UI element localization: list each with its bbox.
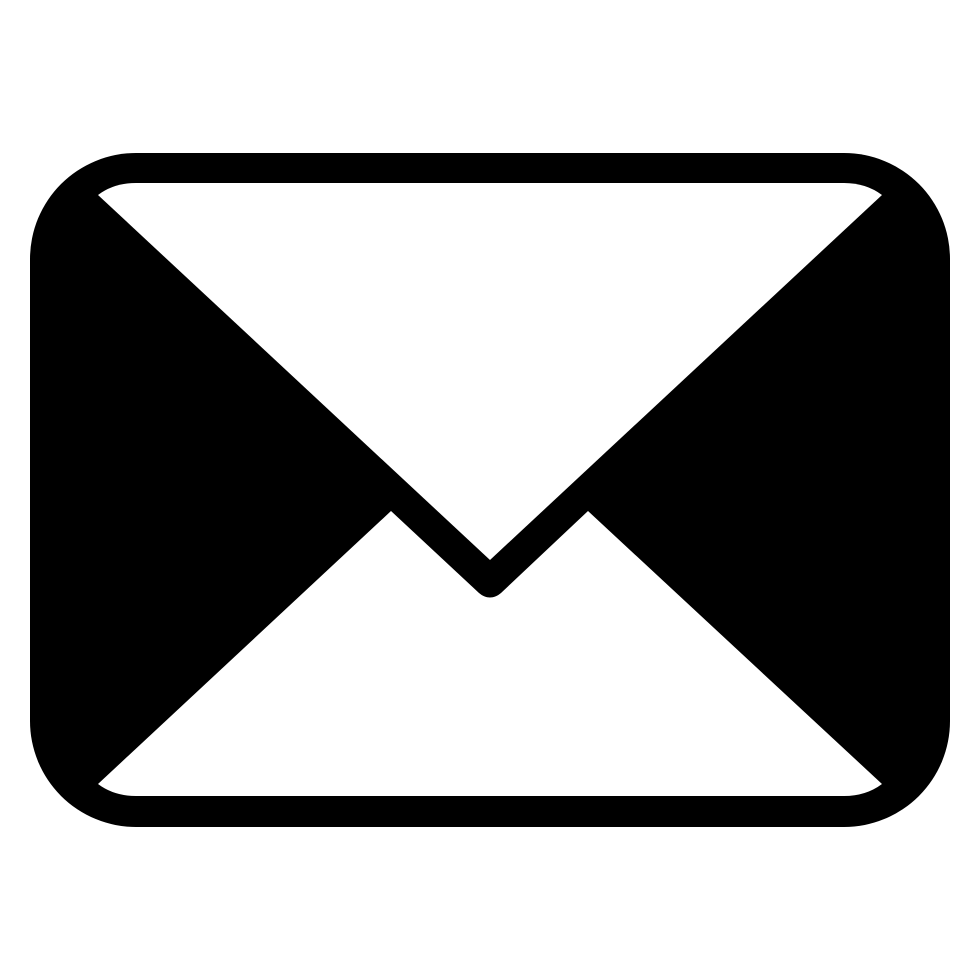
envelope body [30, 153, 950, 827]
top flap [98, 183, 882, 560]
bottom panel [98, 511, 882, 796]
